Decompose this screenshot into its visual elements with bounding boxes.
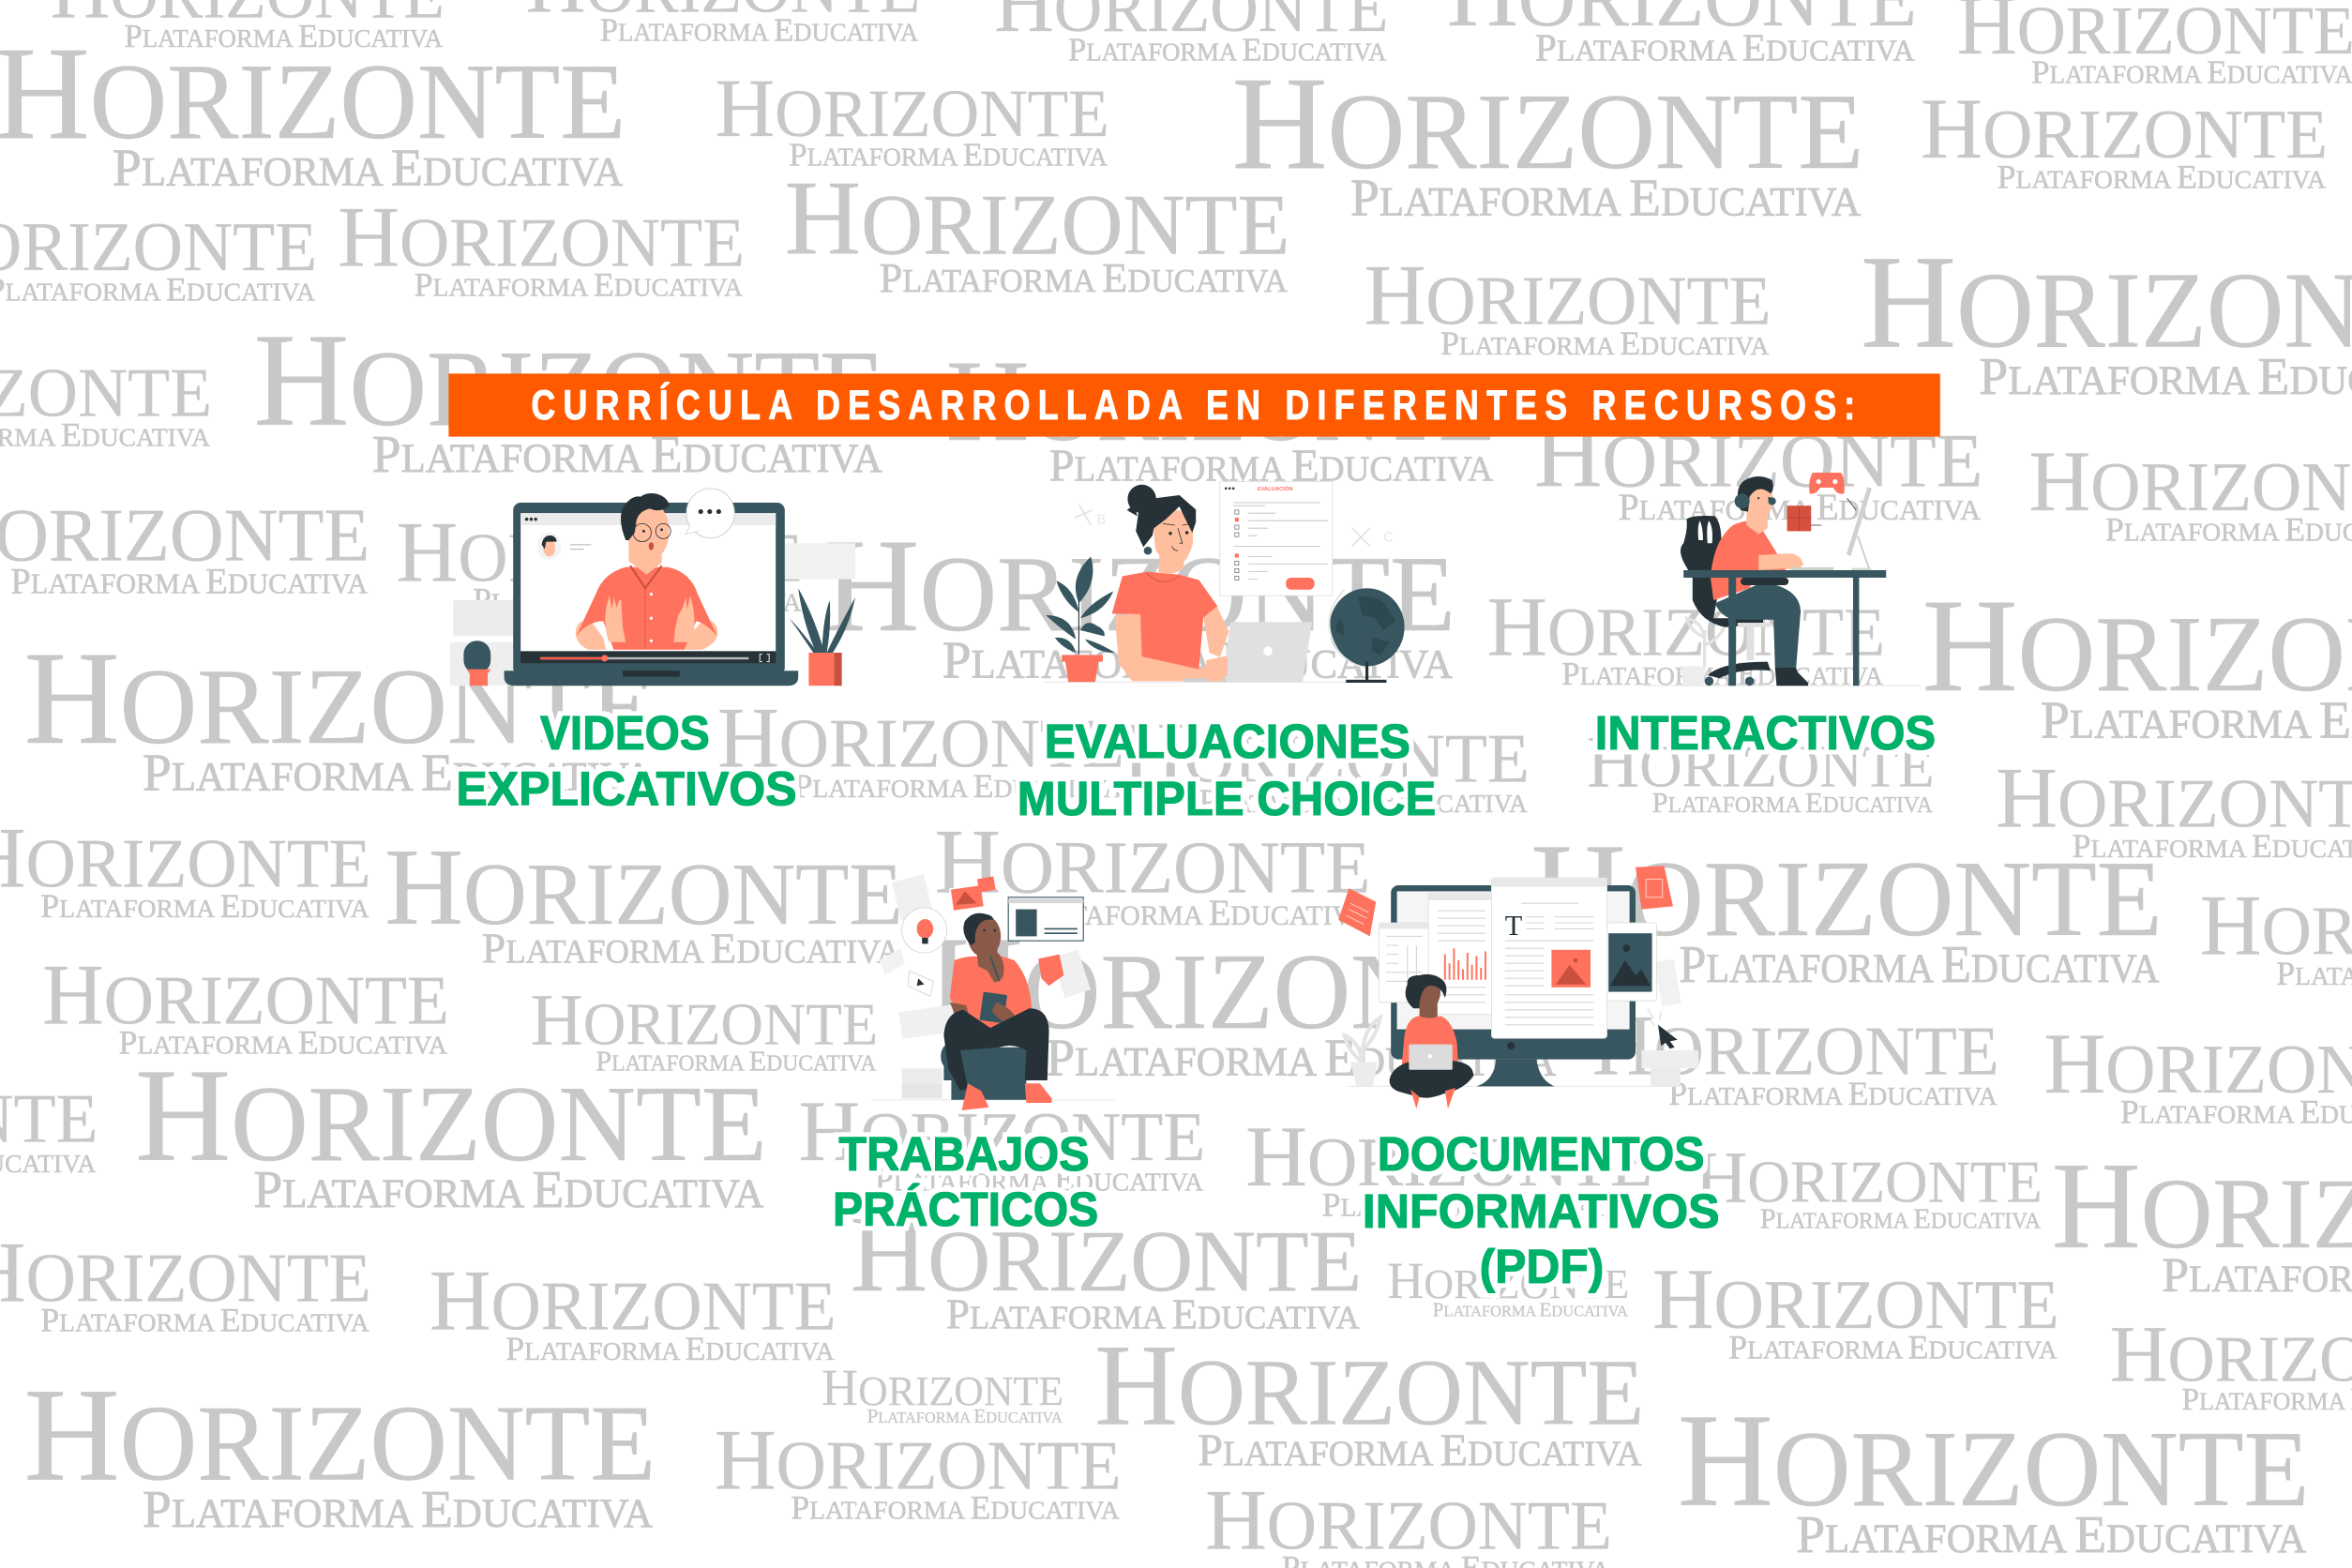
background watermark pattern: Horizonte Plataforma Educativa logos: PLATAFORMA EDUCATIVA bbox=[600, 12, 919, 49]
label: videos explicativos: EXPLICATIVOS bbox=[456, 761, 797, 815]
background watermark pattern: Horizonte Plataforma Educativa logos: PLATAFORMA EDUCATIVA bbox=[1198, 1425, 1641, 1475]
background watermark pattern: Horizonte Plataforma Educativa logos: PLATAFORMA EDUCATIVA bbox=[1046, 1029, 1556, 1087]
background watermark pattern: Horizonte Plataforma Educativa logos: PLATAFORMA EDUCATIVA bbox=[1068, 31, 1387, 68]
background watermark pattern: Horizonte Plataforma Educativa logos: HORIZONTE bbox=[851, 1194, 1362, 1314]
label: evaluaciones multiple choice bbox=[1018, 715, 1436, 825]
background watermark pattern: Horizonte Plataforma Educativa logos: PLATAFORMA EDUCATIVA bbox=[789, 136, 1108, 173]
background watermark pattern: Horizonte Plataforma Educativa logos: PLATAFORMA EDUCATIVA bbox=[1796, 1506, 2306, 1564]
illustration: student reading PDF documents on a monitor: T bbox=[1505, 910, 1523, 942]
background watermark pattern: Horizonte Plataforma Educativa logos: PLATAFORMA EDUCATIVA bbox=[875, 1160, 1203, 1198]
background watermark pattern: Horizonte Plataforma Educativa logos: HORIZONTE bbox=[823, 511, 1455, 659]
background watermark pattern: Horizonte Plataforma Educativa logos: HORIZONTE bbox=[1364, 248, 1771, 343]
background watermark pattern: Horizonte Plataforma Educativa logos: PLATAFORMA EDUCATIVA bbox=[1049, 441, 1493, 491]
background watermark pattern: Horizonte Plataforma Educativa logos: PLATAFORMA EDUCATIVA bbox=[1433, 1299, 1628, 1321]
background watermark pattern: Horizonte Plataforma Educativa logos: HORIZONTE bbox=[384, 827, 903, 948]
label: evaluaciones multiple choice: MULTIPLE CHOICE bbox=[1018, 772, 1436, 825]
title banner: CURRÍCULA DESARROLLADA EN DIFERENTES RECURSOS: bbox=[531, 381, 1855, 429]
background watermark pattern: Horizonte Plataforma Educativa logos: PLATAFORMA EDUCATIVA bbox=[596, 1045, 876, 1077]
background watermark pattern: Horizonte Plataforma Educativa logos: PLATAFORMA EDUCATIVA bbox=[1679, 936, 2159, 994]
background watermark pattern: Horizonte Plataforma Educativa logos: PLATAFORMA EDUCATIVA bbox=[1668, 1075, 1998, 1112]
background watermark pattern: Horizonte Plataforma Educativa logos: HORIZONTE bbox=[1205, 1471, 1612, 1567]
background watermark pattern: Horizonte Plataforma Educativa logos: HORIZONTE bbox=[715, 1411, 1122, 1507]
illustration: woman answering a multiple choice evaluation bbox=[1043, 482, 1405, 683]
background watermark pattern: Horizonte Plataforma Educativa logos: HORIZONTE bbox=[822, 1359, 1063, 1416]
background watermark pattern: Horizonte Plataforma Educativa logos: PLATAFORMA EDUCATIVA bbox=[143, 1481, 653, 1539]
illustration: student reading PDF documents on a monitor bbox=[1338, 866, 1698, 1108]
background watermark pattern: Horizonte Plataforma Educativa logos: PLATAFORMA EDUCATIVA bbox=[1760, 1202, 2041, 1234]
background watermark pattern: Horizonte Plataforma Educativa logos: HORIZONTE bbox=[1678, 1386, 2309, 1534]
illustration: man explaining in a laptop video bbox=[450, 489, 855, 686]
background watermark pattern: Horizonte Plataforma Educativa logos: PLATAFORMA EDUCATIVA bbox=[942, 631, 1453, 689]
background watermark pattern: Horizonte Plataforma Educativa logos: PLATAFORMA EDUCATIVA bbox=[40, 1302, 369, 1339]
background watermark pattern: Horizonte Plataforma Educativa logos: PLATAFORMA EDUCATIVA bbox=[880, 254, 1288, 301]
background watermark pattern: Horizonte Plataforma Educativa logos: PLATAFORMA EDUCATIVA bbox=[1199, 782, 1528, 820]
background watermark pattern: Horizonte Plataforma Educativa logos: PLATAFORMA EDUCATIVA bbox=[1017, 894, 1369, 933]
background watermark pattern: Horizonte Plataforma Educativa logos: HORIZONTE bbox=[717, 690, 1124, 786]
background watermark pattern: Horizonte Plataforma Educativa logos: HORIZONTE bbox=[338, 188, 745, 284]
illustration: woman answering a multiple choice evaluation: B bbox=[1097, 512, 1106, 527]
illustration: woman answering a multiple choice evaluation: C bbox=[1383, 531, 1394, 546]
background watermark pattern: Horizonte Plataforma Educativa logos: PLATAFORMA EDUCATIVA bbox=[1619, 487, 1981, 528]
background watermark pattern: Horizonte Plataforma Educativa logos: HORIZONTE bbox=[1587, 720, 1935, 802]
background watermark pattern: Horizonte Plataforma Educativa logos: PLATAFORMA EDUCATIVA bbox=[40, 887, 369, 925]
label: documentos informativos (pdf): DOCUMENTOS bbox=[1378, 1127, 1705, 1181]
background watermark pattern: Horizonte Plataforma Educativa logos: PLATAFORMA EDUCATIVA bbox=[1728, 1329, 2058, 1366]
background watermark pattern: Horizonte Plataforma Educativa logos: HORIZONTE bbox=[135, 1041, 767, 1189]
background watermark pattern: Horizonte Plataforma Educativa logos: PLATAFORMA EDUCATIVA bbox=[473, 581, 801, 619]
background watermark pattern: Horizonte Plataforma Educativa logos: PLATAFORMA EDUCATIVA bbox=[2031, 54, 2352, 91]
background watermark pattern: Horizonte Plataforma Educativa logos: HORIZONTE bbox=[1695, 1137, 2043, 1218]
background watermark pattern: Horizonte Plataforma Educativa logos: HORIZONTE bbox=[1534, 401, 1983, 506]
background watermark pattern: Horizonte Plataforma Educativa logos: HORIZONTE bbox=[24, 624, 656, 772]
background watermark pattern: Horizonte Plataforma Educativa logos: PLATAFORMA EDUCATIVA bbox=[791, 1489, 1120, 1527]
background watermark pattern: Horizonte Plataforma Educativa logos: HORIZONTE bbox=[715, 63, 1109, 155]
background watermark pattern: Horizonte Plataforma Educativa logos: HORIZONTE bbox=[784, 158, 1289, 278]
background watermark pattern: Horizonte Plataforma Educativa logos: PLATAFORMA EDUCATIVA bbox=[113, 140, 623, 198]
background watermark pattern: Horizonte Plataforma Educativa logos: PLATAFORMA EDUCATIVA bbox=[867, 1405, 1063, 1427]
background watermark pattern: Horizonte Plataforma Educativa logos: HORIZONTE bbox=[397, 504, 803, 599]
background watermark pattern: Horizonte Plataforma Educativa logos: PLATAFORMA EDUCATIVA bbox=[1440, 324, 1769, 362]
background watermark pattern: Horizonte Plataforma Educativa logos: PLATAFORMA EDUCATIVA bbox=[1350, 170, 1861, 228]
background watermark pattern: Horizonte Plataforma Educativa logos: HORIZONTE bbox=[1232, 49, 1863, 197]
background watermark pattern: Horizonte Plataforma Educativa logos: HORIZONTE bbox=[1921, 81, 2328, 176]
background watermark pattern: Horizonte Plataforma Educativa logos: HORIZONTE bbox=[927, 909, 1559, 1057]
background watermark pattern: Horizonte Plataforma Educativa logos: PLATAFORMA EDUCATIVA bbox=[253, 1161, 763, 1219]
label: trabajos prácticos bbox=[833, 1127, 1098, 1236]
background watermark pattern: Horizonte Plataforma Educativa logos: HORIZONTE bbox=[253, 306, 885, 454]
background watermark pattern: Horizonte Plataforma Educativa logos: PLATAFORMA EDUCATIVA bbox=[118, 1024, 447, 1062]
background watermark pattern: Horizonte Plataforma Educativa logos: PLATAFORMA EDUCATIVA bbox=[1322, 1186, 1651, 1224]
label: trabajos prácticos: TRABAJOS bbox=[838, 1127, 1090, 1181]
background watermark pattern: Horizonte Plataforma Educativa logos: HORIZONTE bbox=[430, 1253, 837, 1349]
background watermark pattern: Horizonte Plataforma Educativa logos: HORIZONTE bbox=[24, 1361, 656, 1509]
illustration: gamer using interactive content at a desk bbox=[1643, 473, 1921, 686]
background watermark pattern: Horizonte Plataforma Educativa logos: PLATAFORMA EDUCATIVA bbox=[1535, 27, 1915, 70]
background watermark pattern: Horizonte Plataforma Educativa logos: PLATAFORMA EDUCATIVA bbox=[793, 767, 1123, 805]
background watermark pattern: Horizonte Plataforma Educativa logos: PLATAFORMA EDUCATIVA bbox=[1561, 656, 1883, 692]
background watermark pattern: Horizonte Plataforma Educativa logos: HORIZONTE bbox=[1094, 1320, 1644, 1449]
background watermark pattern: Horizonte Plataforma Educativa logos: HORIZONTE bbox=[1530, 816, 2163, 964]
background watermark pattern: Horizonte Plataforma Educativa logos: PLATAFORMA EDUCATIVA bbox=[1652, 787, 1933, 819]
label: documentos informativos (pdf): INFORMATIVOS bbox=[1363, 1184, 1720, 1238]
label: documentos informativos (pdf): (PDF) bbox=[1480, 1240, 1604, 1293]
background watermark pattern: Horizonte Plataforma Educativa logos: HORIZONTE bbox=[42, 946, 449, 1042]
illustration: woman answering a multiple choice evaluation: EVALUACIÓN bbox=[1258, 485, 1292, 492]
background watermark pattern: Horizonte Plataforma Educativa logos: HORIZONTE bbox=[1487, 580, 1885, 673]
background watermark pattern: Horizonte Plataforma Educativa logos: HORIZONTE bbox=[798, 1083, 1205, 1179]
label: interactivos: INTERACTIVOS bbox=[1595, 706, 1936, 760]
label: documentos informativos (pdf) bbox=[1363, 1127, 1720, 1293]
background watermark pattern: Horizonte Plataforma Educativa logos: HORIZONTE bbox=[1592, 998, 1999, 1093]
label: videos explicativos: VIDEOS bbox=[540, 706, 710, 760]
label: videos explicativos bbox=[456, 706, 797, 815]
background watermark pattern: Horizonte Plataforma Educativa logos: PLATAFORMA EDUCATIVA bbox=[125, 18, 444, 54]
background watermark pattern: Horizonte Plataforma Educativa logos: PLATAFORMA EDUCATIVA bbox=[505, 1330, 835, 1367]
background watermark pattern: Horizonte Plataforma Educativa logos: PLATAFORMA EDUCATIVA bbox=[482, 924, 900, 972]
illustration: student thinking about practical work bbox=[872, 874, 1115, 1110]
background watermark pattern: Horizonte Plataforma Educativa logos: HORIZONTE bbox=[946, 337, 1496, 465]
background watermark pattern: Horizonte Plataforma Educativa logos: PLATAFORMA EDUCATIVA bbox=[946, 1291, 1360, 1338]
background watermark pattern: Horizonte Plataforma Educativa logos: HORIZONTE bbox=[531, 979, 878, 1061]
label: trabajos prácticos: PRÁCTICOS bbox=[833, 1183, 1098, 1236]
background watermark pattern: Horizonte Plataforma Educativa logos: HORIZONTE bbox=[935, 810, 1370, 912]
title banner bbox=[448, 373, 1940, 437]
background watermark pattern: Horizonte Plataforma Educativa logos: PLATAFORMA EDUCATIVA bbox=[1998, 158, 2326, 196]
background watermark pattern: Horizonte Plataforma Educativa logos: HORIZONTE bbox=[1245, 1108, 1652, 1204]
background watermark pattern: Horizonte Plataforma Educativa logos: PLATAFORMA EDUCATIVA bbox=[143, 744, 653, 802]
background watermark pattern: Horizonte Plataforma Educativa logos: PLATAFORMA EDUCATIVA bbox=[372, 426, 882, 484]
background watermark pattern: Horizonte Plataforma Educativa logos: PLATAFORMA EDUCATIVA bbox=[415, 266, 743, 304]
label: evaluaciones multiple choice: EVALUACIONES bbox=[1045, 715, 1410, 768]
background watermark pattern: Horizonte Plataforma Educativa logos: HORIZONTE bbox=[1387, 1252, 1629, 1309]
background watermark pattern: Horizonte Plataforma Educativa logos: PLATAFORMA EDUCATIVA bbox=[10, 562, 368, 602]
background watermark pattern: Horizonte Plataforma Educativa logos: HORIZONTE bbox=[1652, 1251, 2059, 1347]
background watermark pattern: Horizonte Plataforma Educativa logos: HORIZONTE bbox=[1123, 705, 1530, 801]
background watermark pattern: Horizonte Plataforma Educativa logos: HORIZONTE bbox=[0, 19, 626, 167]
